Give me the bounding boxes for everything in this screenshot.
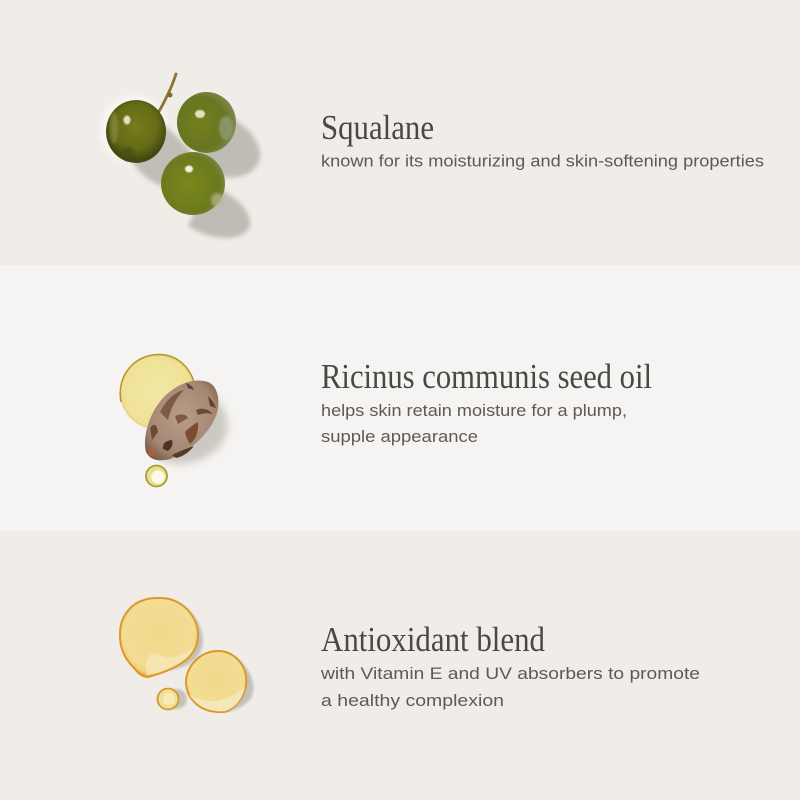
panel: squalane bbox=[0, 0, 800, 265]
heading: Ricinus communis seed oil: Ricinus communis seed oil bbox=[321, 357, 652, 396]
text: squalane description: known for its moisturizing and skin-softening properties bbox=[321, 152, 764, 170]
text: ricinus description: helps skin retain moisture for a plump, bbox=[321, 402, 627, 420]
text: ricinus description bbox=[321, 402, 627, 446]
text: antioxidant description: a healthy complexion bbox=[321, 692, 504, 710]
icon: olives bbox=[100, 74, 260, 238]
text: antioxidant description bbox=[320, 665, 700, 710]
text: ricinus description: supple appearance bbox=[321, 428, 478, 446]
panel: ricinus bbox=[0, 265, 800, 531]
icon: oil droplets bbox=[120, 598, 253, 712]
text: antioxidant description: with Vitamin E and UV absorbers to promote bbox=[320, 665, 700, 683]
heading: Squalane: Squalane bbox=[321, 108, 434, 147]
heading: Antioxidant blend: Antioxidant blend bbox=[321, 620, 545, 659]
panel: antioxidant blend bbox=[0, 531, 800, 800]
icon: seed and oil bbox=[120, 354, 228, 486]
